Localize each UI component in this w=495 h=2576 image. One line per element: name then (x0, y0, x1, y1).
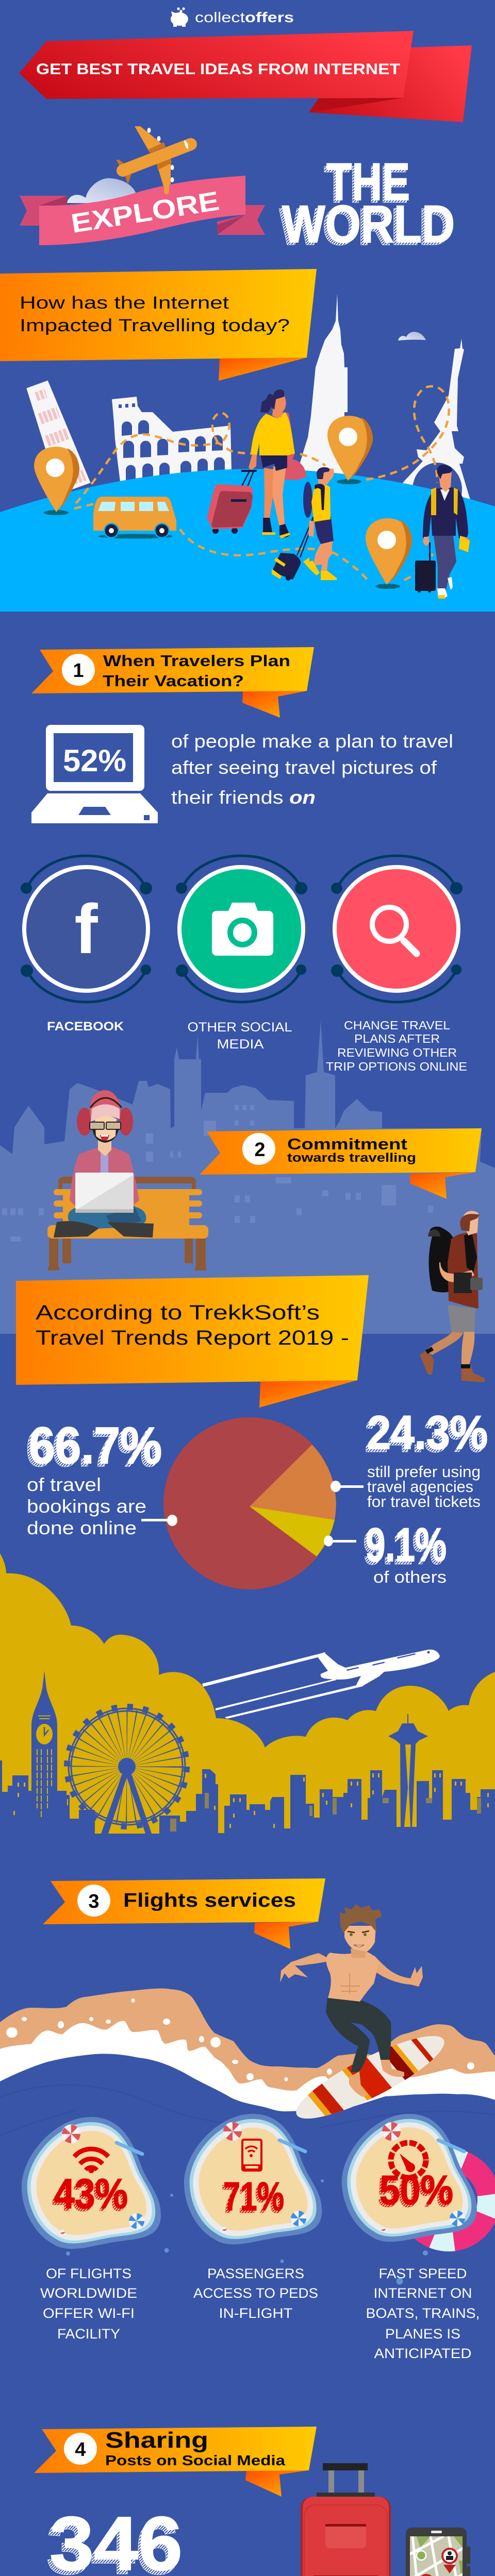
island: speed gauge 50% (342, 2114, 477, 2242)
traveller: woman with suitcase (207, 389, 306, 538)
icon: search badge (331, 856, 463, 1002)
stat: 66.7% online bookings: 66.7% (29, 1417, 162, 1475)
stat: 9.1% others: 9.1% (366, 1519, 447, 1571)
landmark: colosseum (112, 397, 232, 482)
illustration: lifebuoy (408, 2160, 489, 2240)
text: badge labels: PLANS AFTER (354, 1032, 440, 1045)
heading: THE WORLD: THE (324, 155, 408, 214)
location pins (34, 416, 412, 589)
text: flight stats captions: ANTICIPATED (374, 2346, 471, 2361)
text: badge labels: TRIP OPTIONS ONLINE (326, 1060, 467, 1073)
pie chart (163, 1417, 336, 1589)
section 4 ribbon: 4 (75, 2439, 86, 2461)
section 2 ribbon: 2 (254, 1139, 266, 1161)
ribbon: EXPLORE: EXPLORE (69, 186, 221, 239)
illustration: yellow cloud bank (0, 1553, 495, 1839)
stat: 24.3% travel agencies (331, 1406, 488, 1511)
illustration: surfer on board (280, 1904, 444, 2119)
text: flight stats captions: ACCESS TO PEDS (193, 2285, 318, 2301)
section 4 ribbon (34, 2427, 317, 2497)
illustration: city skyline with big wheel (0, 1671, 495, 1865)
island: speed gauge 50%: 50% (377, 2170, 451, 2215)
water droplets (66, 2179, 428, 2284)
text: badge labels: REVIEWING OTHER (337, 1046, 457, 1059)
section 1 ribbon: 1 (73, 660, 84, 682)
icon: orange bus (93, 497, 176, 539)
heading: THE WORLD: WORLD (282, 195, 455, 253)
illustration: red suitcase (289, 2463, 487, 2576)
section 2 ribbon: Commitment (287, 1135, 407, 1153)
logo: collectoffers: collect offers (195, 9, 294, 25)
traveller: man with cabin case (415, 465, 470, 599)
text: 52% statement: of people make a plan to travel (171, 731, 453, 752)
text: flight stats captions: WORLDWIDE (40, 2285, 137, 2301)
island: phone 71% (184, 2114, 322, 2244)
text: badge labels: FACEBOOK (47, 1020, 124, 1033)
text: badge labels: CHANGE TRAVEL (344, 1019, 450, 1032)
heading: THE WORLD: THE (326, 152, 410, 211)
city skyline background, section 2 (0, 1020, 495, 1334)
text: flight stats captions: INTERNET ON (373, 2285, 472, 2301)
section 3 ribbon: Flights services (123, 1890, 296, 1911)
stat: 9.1% others: of others (373, 1568, 447, 1586)
text: 52% statement: their friends on (171, 787, 316, 808)
text: 52% statement (171, 731, 453, 808)
heading banner: TrekkSoft report: According to TrekkSoft’s (36, 1301, 320, 1324)
stat: 66.7% online bookings: bookings are (27, 1496, 146, 1517)
heading banner: TrekkSoft report: Travel Trends Report 2019 - (36, 1327, 349, 1349)
stat: 346 million posts (42, 2501, 277, 2576)
text: flight stats captions: OF FLIGHTS (46, 2266, 131, 2281)
text: badge labels: OTHER SOCIAL (188, 1020, 292, 1035)
stat: 66.7% online bookings: 66.7% (26, 1420, 159, 1478)
dashed route lines (74, 386, 449, 580)
stat: 66.7% online bookings: done online (27, 1517, 137, 1538)
illustration: orange plane over cloud (67, 126, 191, 204)
icon: laptop with 52%: 52% (63, 743, 126, 778)
section 1 ribbon: Their Vacation? (103, 672, 244, 690)
illustration: woman on bench with laptop (47, 1090, 208, 1270)
landmark: leaning tower of Pisa (22, 379, 91, 494)
island: speed gauge 50%: 50% (380, 2167, 453, 2213)
text: flight stats captions: PASSENGERS (207, 2266, 304, 2281)
heading banner: question: How has the Internet (20, 293, 229, 313)
hero globe (0, 469, 495, 612)
island: wifi 43%: 43% (52, 2173, 126, 2220)
text: flight stats captions: FAST SPEED (378, 2266, 467, 2281)
illustration: white airliner (202, 1650, 440, 1719)
text: flight stats captions: FACILITY (57, 2326, 120, 2342)
island: wifi 43%: 43% (54, 2171, 128, 2217)
title ribbon (19, 31, 472, 122)
ribbon: EXPLORE (20, 176, 265, 245)
stat: 24.3% travel agencies: still prefer using (367, 1463, 481, 1481)
landmark: Eiffel Tower (403, 338, 470, 516)
landmark: Empire State Building (300, 294, 348, 489)
stat: 24.3% travel agencies: travel agencies (367, 1478, 473, 1496)
island: phone 71%: 71% (223, 2174, 284, 2219)
traveller: boy with rolling backpack (272, 467, 337, 581)
stat: 24.3% travel agencies: for travel tickets (367, 1493, 481, 1511)
section 2 ribbon (200, 1128, 482, 1199)
heading banner: question (0, 269, 317, 381)
section 3 ribbon (43, 1878, 325, 1949)
stat: 66.7% online bookings: of travel (27, 1474, 101, 1495)
illustration: hiker with backpack (420, 1211, 485, 1382)
text: flight stats captions: BOATS, TRAINS, (366, 2306, 480, 2321)
text: flight stats captions: IN-FLIGHT (219, 2306, 293, 2321)
heading: THE WORLD (279, 152, 455, 256)
title ribbon: GET BEST TRAVEL IDEAS FROM INTERNET (36, 61, 400, 78)
illustration: smartphone with map (406, 2528, 470, 2576)
section 4 ribbon: Posts on Social Media (105, 2452, 285, 2468)
text: badge labels: MEDIA (217, 1037, 264, 1052)
subtle water ripples (0, 2085, 495, 2136)
heading banner: TrekkSoft report (16, 1275, 369, 1408)
text: flight stats captions (40, 2266, 480, 2361)
illustration: sandy wave and foam (0, 1989, 495, 2112)
island: phone 71%: 71% (221, 2176, 282, 2222)
text: 52% statement: after seeing travel pictures of (171, 757, 437, 778)
heading: THE WORLD: WORLD (279, 197, 452, 256)
section 4 ribbon: Sharing (105, 2428, 208, 2453)
icon: facebook badge: f (74, 890, 98, 968)
heading banner: question: Impacted Travelling today? (20, 316, 290, 335)
stat: 66.7% online bookings (26, 1417, 177, 1538)
stat: 9.1% others (324, 1519, 447, 1586)
section 3 ribbon: 3 (88, 1891, 100, 1912)
small cloud (398, 332, 426, 341)
text: flight stats captions: OFFER WI-FI (43, 2306, 135, 2321)
island: wifi 43% (22, 2117, 161, 2249)
icon: laptop with 52% (31, 725, 158, 823)
text: flight stats captions: PLANES IS (385, 2326, 460, 2342)
section 1 ribbon: When Travelers Plan (103, 652, 290, 670)
section 2 ribbon: towards travelling (287, 1151, 416, 1165)
text: badge labels (47, 1019, 467, 1073)
icon: facebook badge (21, 856, 152, 1002)
stat: 9.1% others: 9.1% (363, 1522, 444, 1574)
logo: collectoffers (171, 7, 294, 27)
section 1 ribbon (31, 647, 314, 718)
icon: camera badge (176, 856, 307, 1002)
